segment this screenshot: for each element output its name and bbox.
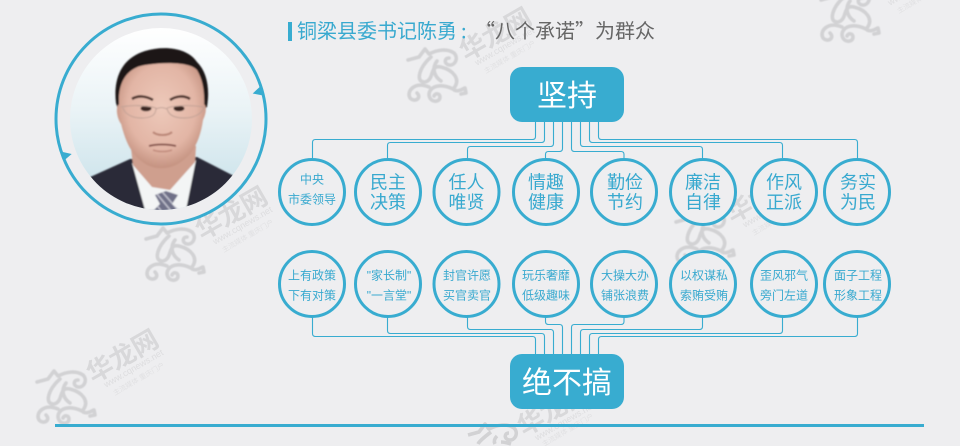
connectors: bottom — [312, 317, 858, 354]
mouth — [149, 144, 176, 146]
circle: 上有政策下有对策 — [280, 252, 344, 316]
circle: 面子工程形象工程: 形象工程 — [834, 288, 882, 302]
circle: 上有政策下有对策: 上有政策 — [288, 268, 336, 282]
circle: 中央市委领导: 市委领导 — [288, 192, 336, 206]
watermark: under portrait: 主流媒体 重庆门户 — [220, 217, 275, 254]
watermark: bottom left: 华龙网 — [81, 324, 164, 389]
circle: 歪风邪气旁门左道: 旁门左道 — [760, 288, 808, 302]
hair — [115, 48, 208, 116]
watermark: bottom centre: 华龙网 — [512, 377, 595, 442]
circle: 作风正派: 正派 — [766, 192, 802, 212]
heading box: 绝不搞: 绝不搞 — [522, 367, 612, 400]
watermark: between circle rows — [676, 164, 805, 263]
title: 铜梁县委书记陈勇 — [297, 15, 457, 44]
ears — [117, 104, 123, 126]
circle: 玩乐奢靡低级趣味: 低级趣味 — [522, 288, 570, 302]
circle: 以权谋私索贿受贿: 索贿受贿 — [680, 288, 728, 302]
suit jacket — [90, 156, 233, 210]
portrait ring with arrowheads — [56, 14, 266, 224]
watermark: under title — [408, 2, 537, 101]
circle: 民主决策: 民主 — [370, 172, 406, 192]
title — [288, 15, 655, 44]
portrait photo — [70, 28, 252, 216]
circle: 务实为民: 为民 — [840, 192, 876, 212]
circle: 勤俭节约: 节约 — [607, 192, 643, 212]
circle: 大操大办铺张浪费: 大操大办 — [601, 268, 649, 282]
tie — [154, 190, 178, 210]
nose — [153, 132, 172, 135]
watermark: under title: www.cqnews.net — [472, 25, 536, 68]
circle: 任人唯贤: 任人 — [448, 172, 484, 192]
circle: 封官许愿买官卖官: 封官许愿 — [443, 268, 491, 282]
title: : — [461, 15, 467, 44]
circle: 歪风邪气旁门左道 — [752, 252, 816, 316]
watermark: under title: 华龙网 — [454, 2, 537, 67]
watermark: between circle rows: 华龙网 — [720, 164, 803, 229]
circle: 情趣健康: 情趣 — [528, 172, 564, 192]
eyebrows — [132, 96, 153, 100]
circle: 面子工程形象工程 — [824, 252, 890, 316]
watermark: bottom centre — [468, 377, 596, 446]
face — [119, 63, 204, 168]
glasses — [121, 106, 204, 118]
circle: 作风正派 — [752, 160, 816, 224]
circle: 务实为民 — [824, 160, 890, 224]
bottom rule — [55, 424, 924, 427]
circle: 中央市委领导 — [280, 160, 344, 224]
circle: 民主决策 — [356, 160, 420, 224]
circle: 廉洁自律 — [670, 160, 736, 224]
circle: 以权谋私索贿受贿 — [670, 252, 736, 316]
shirt collar — [132, 160, 196, 210]
watermark: under title: 主流媒体 重庆门户 — [482, 38, 537, 75]
circle: 情趣健康 — [514, 160, 578, 224]
circle: 勤俭节约: 勤俭 — [607, 172, 643, 192]
watermark: bottom left: 主流媒体 重庆门户 — [111, 360, 166, 397]
circle: 大操大办铺张浪费 — [592, 252, 656, 316]
circle: 封官许愿买官卖官: 买官卖官 — [443, 288, 491, 302]
watermark: under portrait — [146, 181, 275, 280]
circle: 玩乐奢靡低级趣味 — [514, 252, 578, 316]
neck — [131, 146, 196, 190]
circle: 上有政策下有对策: 下有对策 — [288, 288, 336, 302]
watermark: bottom centre: www.cqnews.net — [532, 400, 596, 443]
watermark: under portrait: 华龙网 — [190, 181, 273, 246]
watermark: under portrait: www.cqnews.net — [210, 204, 274, 247]
circle: 任人唯贤 — [434, 160, 499, 224]
circle: 中央市委领导: 中央 — [300, 172, 324, 186]
watermark: between circle rows: 主流媒体 重庆门户 — [750, 200, 805, 237]
circle: 玩乐奢靡低级趣味: 玩乐奢靡 — [522, 268, 570, 282]
connectors: top — [312, 122, 858, 158]
circle: 家长制一言堂 — [356, 252, 420, 316]
watermark: bottom left: www.cqnews.net — [101, 347, 165, 390]
eyes — [140, 106, 152, 111]
circle: 家长制一言堂: "一言堂" — [367, 288, 411, 302]
circle: 廉洁自律: 廉洁 — [685, 172, 721, 192]
heading box: 坚持: 坚持 — [537, 80, 597, 113]
circle: 歪风邪气旁门左道: 歪风邪气 — [760, 268, 808, 282]
heading box: 绝不搞 — [510, 354, 624, 409]
circle: 作风正派: 作风 — [766, 172, 802, 192]
watermark: top right — [821, 0, 950, 41]
circle: 大操大办铺张浪费: 铺张浪费 — [601, 288, 649, 302]
circle: 情趣健康: 健康 — [528, 192, 564, 212]
circle: 任人唯贤: 唯贤 — [448, 192, 484, 212]
watermark: between circle rows: www.cqnews.net — [740, 187, 804, 230]
circle: 廉洁自律: 自律 — [685, 192, 721, 212]
circle: 以权谋私索贿受贿: 以权谋私 — [680, 268, 728, 282]
circle: 面子工程形象工程: 面子工程 — [834, 268, 882, 282]
circle: 务实为民: 务实 — [840, 172, 876, 192]
title: “八个承诺”为群众 — [475, 15, 655, 44]
watermark: bottom left — [37, 324, 166, 423]
circle: 封官许愿买官卖官 — [434, 252, 499, 316]
circle: 勤俭节约 — [592, 160, 656, 224]
circle: 家长制一言堂: "家长制" — [367, 268, 411, 282]
heading box: 坚持 — [510, 67, 624, 122]
circle: 民主决策: 决策 — [370, 192, 406, 212]
